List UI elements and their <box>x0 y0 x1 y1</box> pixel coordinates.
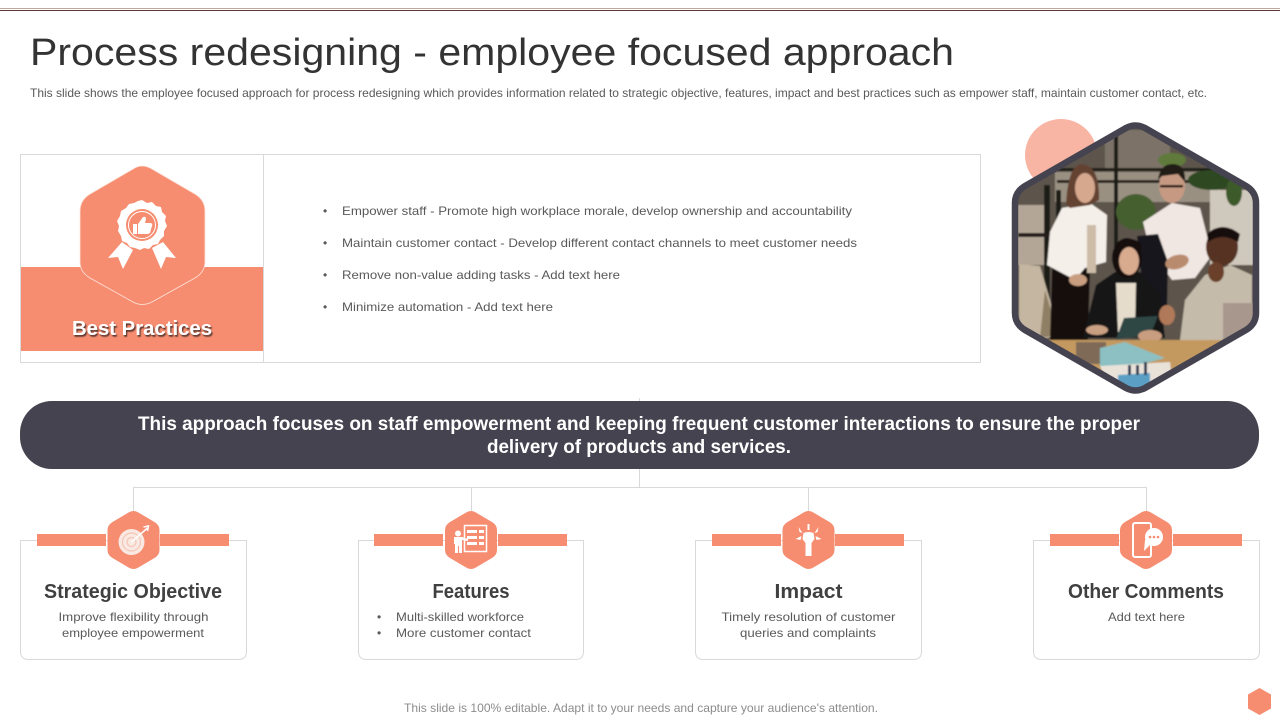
best practices list: • <box>323 204 327 218</box>
best practices list: • <box>323 300 327 314</box>
banner: approach statement: This approach focuses on staff empowerment and keeping frequent customer interactions to ensure the proper <box>138 414 1141 435</box>
seated woman <box>1083 272 1165 338</box>
card: strategic objective <box>20 511 246 660</box>
text: features list: • <box>377 610 381 624</box>
text: impact: queries and complaints <box>740 626 876 640</box>
text: features list: Multi-skilled workforce <box>396 610 524 624</box>
right man <box>1180 265 1252 340</box>
text: features list <box>377 610 532 640</box>
icon: presenter with board <box>445 511 497 569</box>
icon: raised fist with sparks <box>782 511 834 569</box>
panel: best practices <box>20 154 980 362</box>
heading: impact: Impact <box>774 581 843 603</box>
text: features list: More customer contact <box>396 626 532 640</box>
glasses man <box>1143 203 1212 280</box>
photo: team in hexagon <box>1010 120 1260 395</box>
text: features list: • <box>377 626 381 640</box>
icon: best practices badge <box>80 166 205 304</box>
table <box>1048 338 1222 371</box>
icon: phone with speech bubble <box>1120 511 1172 569</box>
icon: target <box>108 511 160 569</box>
text: strategic objective: Improve flexibility through <box>58 610 208 624</box>
text: strategic objective <box>58 610 208 640</box>
card: impact <box>696 511 922 660</box>
title: Process redesigning - employee focused approach <box>30 32 954 74</box>
best practices list: Minimize automation - Add text here <box>342 300 553 314</box>
best practices list: Maintain customer contact - Develop different contact channels to meet customer needs <box>342 236 857 250</box>
best practices list: Remove non-value adding tasks - Add text here <box>342 268 620 282</box>
heading: features: Features <box>432 581 510 603</box>
heading: strategic objective: Strategic Objective <box>44 581 222 603</box>
best practices list: • <box>323 236 327 250</box>
text: strategic objective: employee empowerment <box>62 626 205 640</box>
footer note: This slide is 100% editable. Adapt it to your needs and capture your audience's attention. <box>404 701 878 715</box>
icon: corner hexagon <box>1248 688 1271 715</box>
best practices list: • <box>323 268 327 282</box>
decorative peach circle <box>1025 119 1097 191</box>
chair <box>1137 234 1168 310</box>
best practices list <box>323 204 857 314</box>
heading: other comments: Other Comments <box>1068 581 1224 603</box>
banner: approach statement <box>20 401 1259 469</box>
text: other comments: Add text here <box>1108 610 1185 624</box>
banner: approach statement: delivery of products and services. <box>487 437 791 458</box>
text: impact <box>722 610 896 640</box>
tablet <box>1116 316 1158 339</box>
card: other comments <box>1034 511 1260 660</box>
connector lines <box>134 398 1146 511</box>
best practices list: Empower staff - Promote high workplace morale, develop ownership and accountability <box>342 204 852 218</box>
label: best practices: Best Practices <box>72 318 212 340</box>
text: impact: Timely resolution of customer <box>722 610 896 624</box>
top rule <box>0 8 1280 11</box>
card: features <box>358 511 584 660</box>
standing woman <box>1050 268 1090 340</box>
background person <box>1018 264 1052 339</box>
subtitle: This slide shows the employee focused approach for process redesigning which provides information related to strategic objective, features, impact and best practices such as empower staff, maintain customer contact, etc. <box>30 86 1207 100</box>
